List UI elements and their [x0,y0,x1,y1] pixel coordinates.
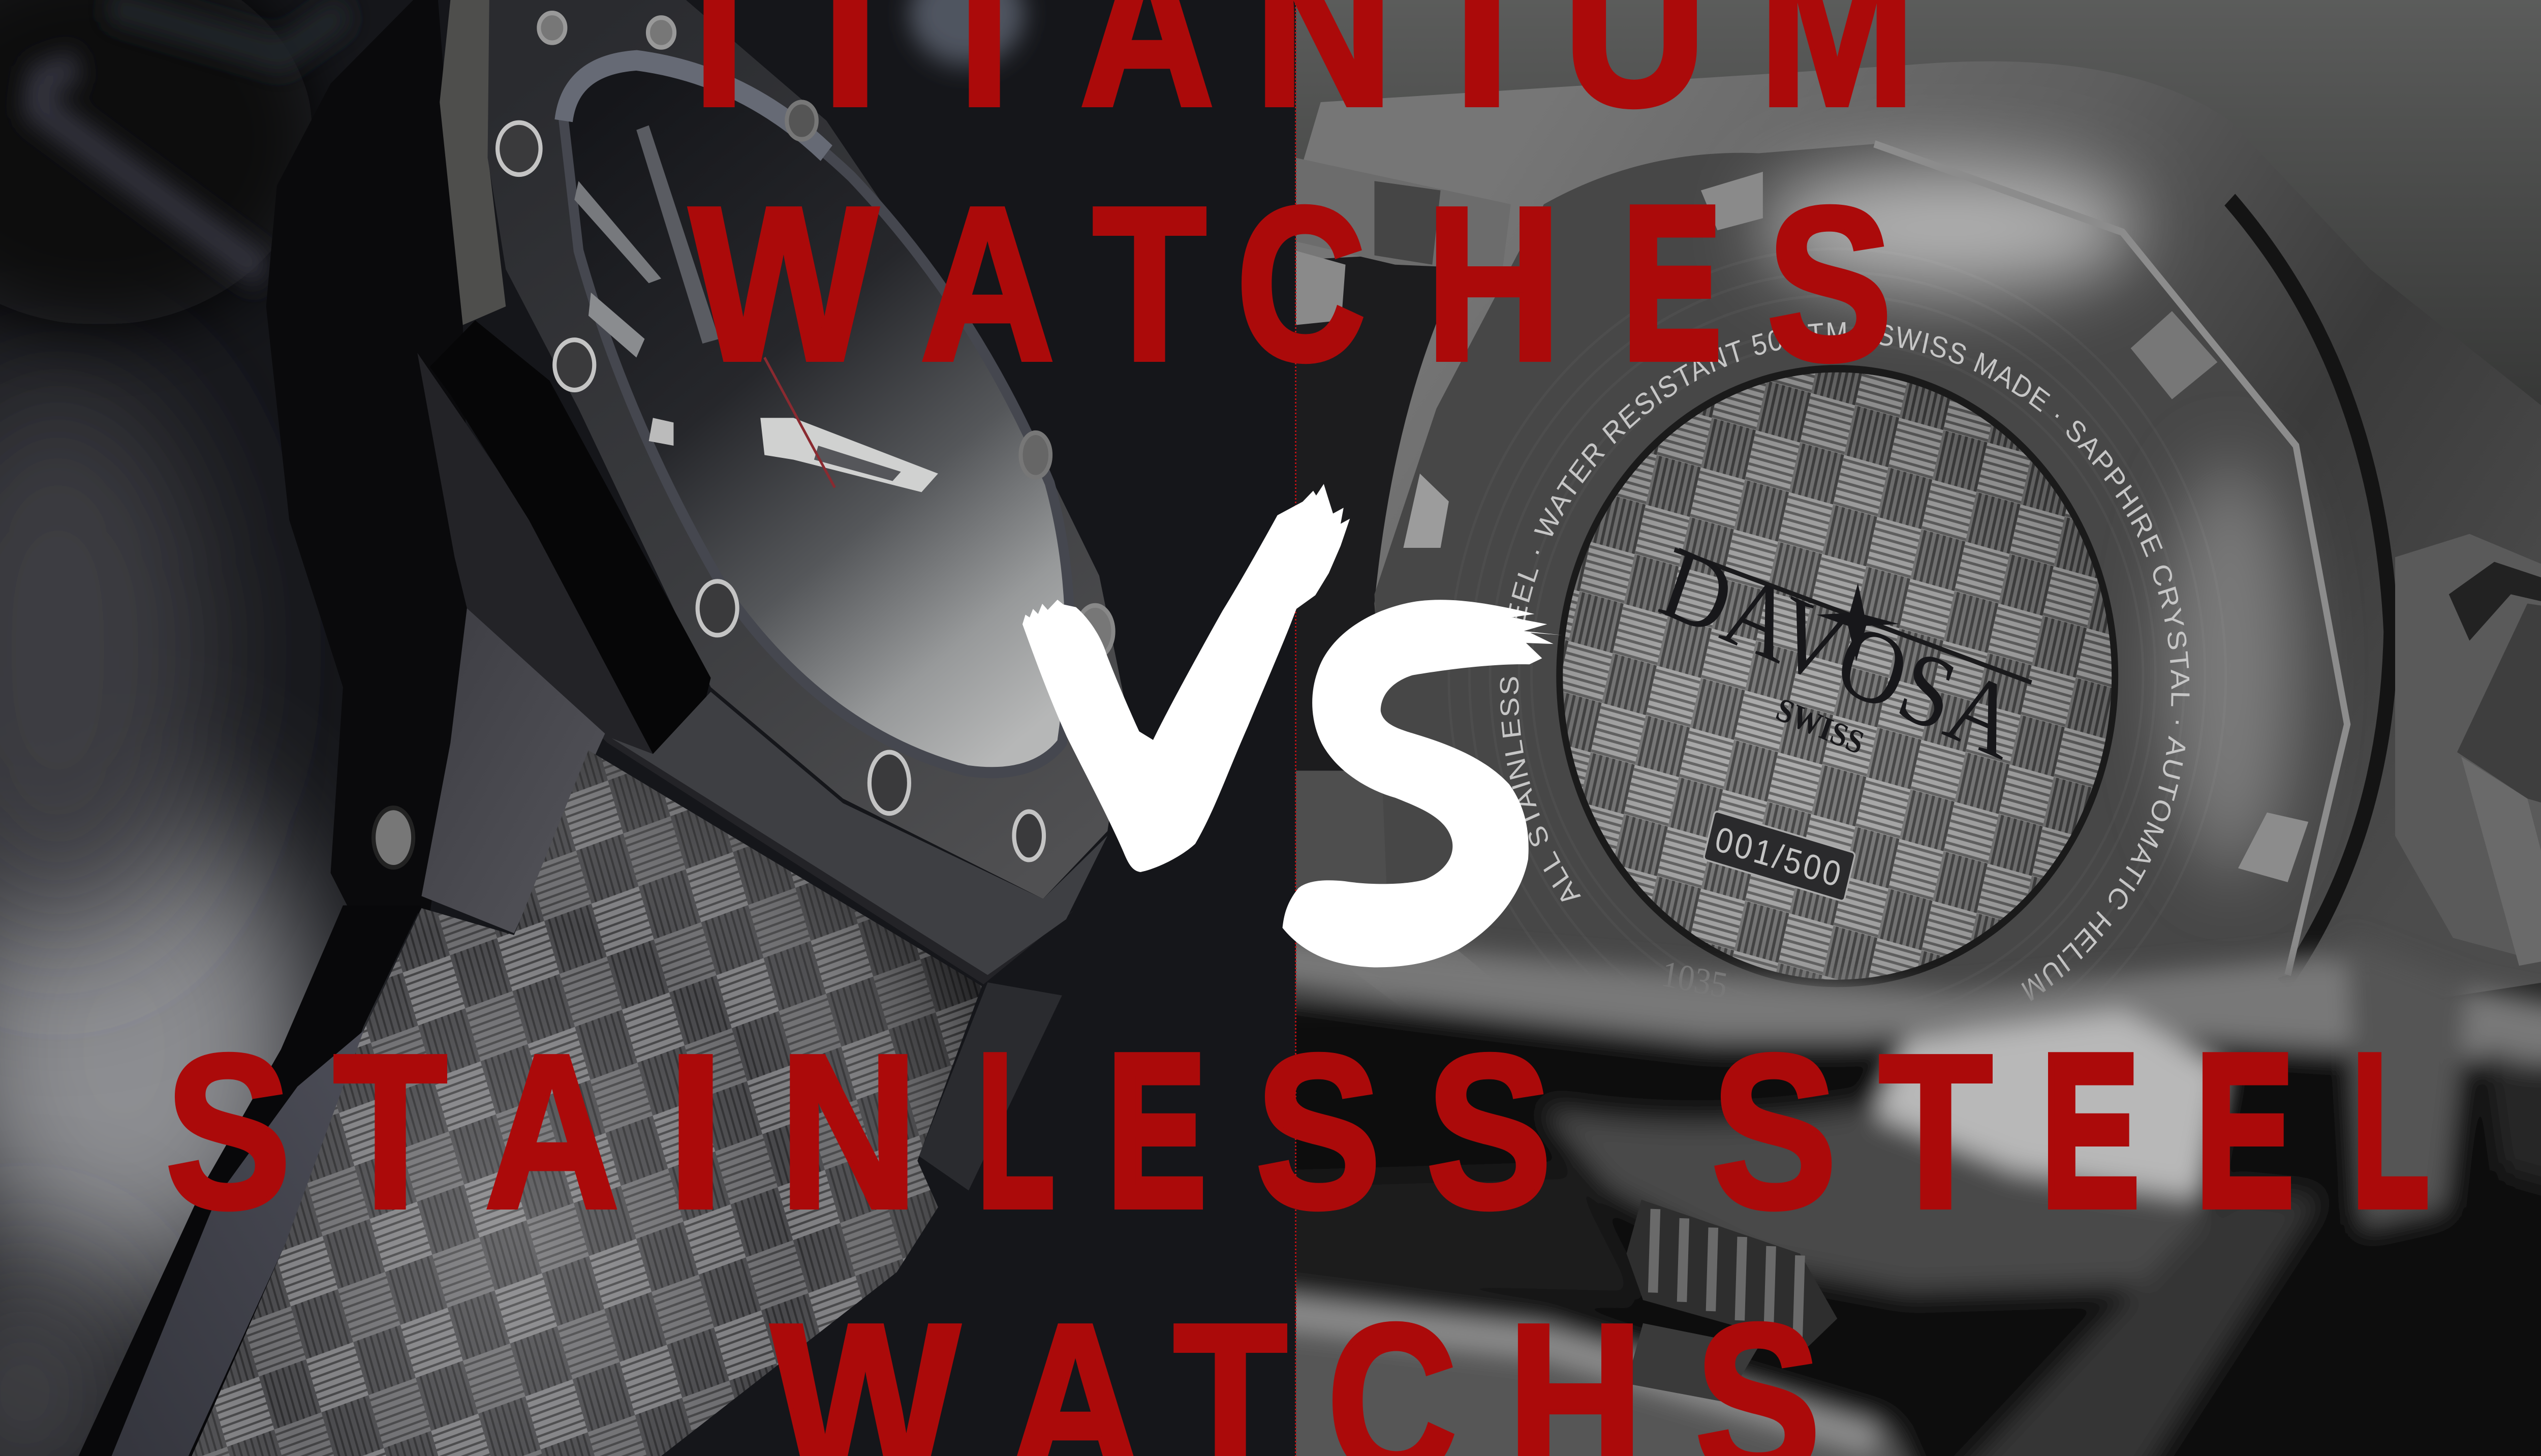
panel: titanium watch photo [0,0,1296,1456]
heading: STAINLESS STEEL: E [1108,1010,1205,1251]
heading: TITANIUM [662,0,1915,151]
heading: WATCHES: E [1623,162,1721,403]
panel: stainless steel watch photo [1246,0,2541,1456]
logo: DAVOSA: SWISS [1772,691,1868,762]
black case side [266,0,471,915]
crown [1627,1200,1837,1402]
heading: STAINLESS STEEL: L [978,1010,1054,1251]
dial hands and markers [574,126,938,492]
heading: STAINLESS STEEL: A [485,1009,619,1254]
heading: STAINLESS STEEL: T [333,1009,447,1254]
blurred strap in background [37,0,1025,274]
heading: WATCHES: S [1767,162,1892,406]
heading: WATCHES: H [1426,162,1562,406]
logo: DAVOSA: DAVOSA [1648,524,2032,781]
heading: WATCHES: W [690,162,879,406]
heading: WATCHES: A [920,162,1055,406]
heading: STAINLESS STEEL: L [2352,1010,2429,1251]
crystal rim highlight [564,60,826,153]
heading: STAINLESS STEEL: N [779,1009,918,1253]
case lug [421,608,605,933]
background [0,0,1296,1456]
strap side strip [112,1031,364,1456]
brushed concentric lines [1449,249,2226,1103]
right lug [919,982,1062,1190]
dark left interior [1296,251,1470,771]
heading: STAINLESS STEEL: S [166,1009,291,1253]
textured strap [192,750,982,1456]
brush letter V [1022,484,1350,872]
dial [564,60,1070,772]
dotted centre divider [1295,0,1296,1456]
heading: WATCHES [690,162,1892,406]
bezel screws [374,13,1113,868]
rubber strap edge [78,906,421,1456]
brush letter S [1283,600,1562,968]
heading: WATCHES: C [1236,162,1366,406]
woven disk [1556,365,2118,987]
heading: STAINLESS STEEL [166,1009,2429,1254]
heading: STAINLESS STEEL: E [2196,1010,2294,1251]
engraved ring text: ALL STAINLESS STEEL · WATER RESISTANT 50 ATM · SWISS MADE · SAPPHIRE CRYSTAL · AUTOMATIC HELIUM [1500,322,2189,1001]
bracelet link top left [1296,158,1511,325]
mid case [417,353,1074,984]
steel case [1296,61,2541,1114]
light case band [440,0,506,325]
lower bezel edge [611,692,1107,975]
heading: WATCHES: T [1093,162,1206,406]
heading: STAINLESS STEEL: T [1879,1009,1993,1254]
engraved serial: 1035 [1659,952,1730,1006]
bezel [488,0,1126,899]
foreground blurred bracelet [1246,928,2541,1456]
serial plate: 001/500 [1712,819,1847,895]
heading: STAINLESS STEEL: S [1712,1009,1837,1253]
heading: STAINLESS STEEL: E [2041,1010,2139,1251]
heading: STAINLESS STEEL: S [1427,1009,1552,1253]
background [1296,0,2541,1456]
heading: STAINLESS STEEL: I [667,1009,724,1253]
lower-left brushed case [1296,771,1436,938]
brush lettering: VS [0,0,1562,968]
case back [1374,144,2347,1049]
bracelet link right [2395,534,2541,975]
heading: STAINLESS STEEL: S [1256,1009,1381,1253]
dark gasket ring [2230,200,2391,984]
bezel recess [430,320,711,754]
back notches [1403,172,2308,882]
heading: WATCHS [771,1279,1820,1456]
